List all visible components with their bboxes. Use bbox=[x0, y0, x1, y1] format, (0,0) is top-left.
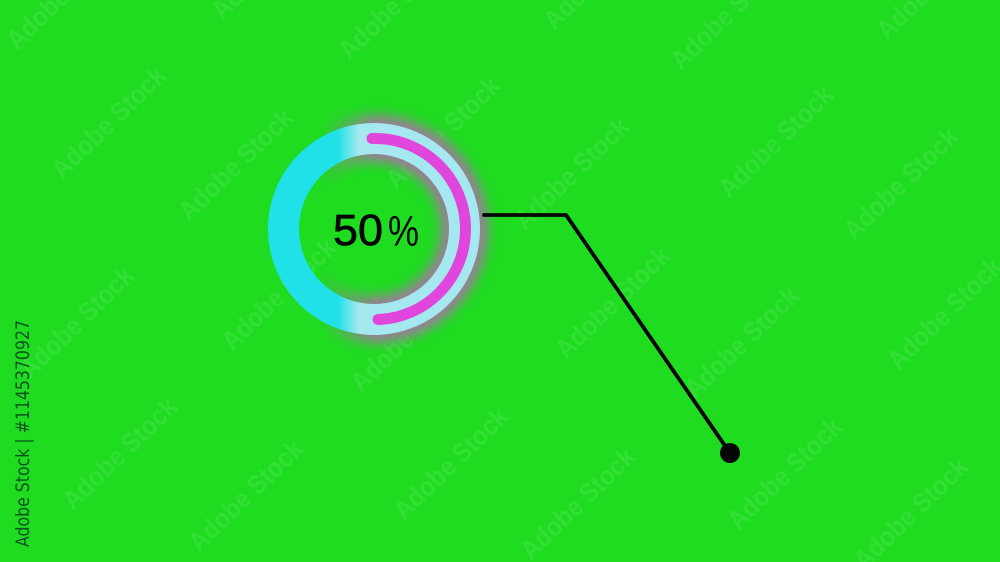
percentage label bbox=[333, 206, 419, 256]
progress ring bbox=[284, 138, 464, 320]
stock id label: Adobe Stock | #1145370927 bbox=[12, 320, 34, 547]
leader line bbox=[484, 215, 730, 453]
magenta progress arc bbox=[372, 138, 466, 320]
percentage label: % bbox=[388, 208, 419, 256]
glow halo behind ring bbox=[284, 138, 464, 320]
percentage label: 50 bbox=[333, 206, 383, 255]
leader end dot bbox=[720, 443, 740, 463]
